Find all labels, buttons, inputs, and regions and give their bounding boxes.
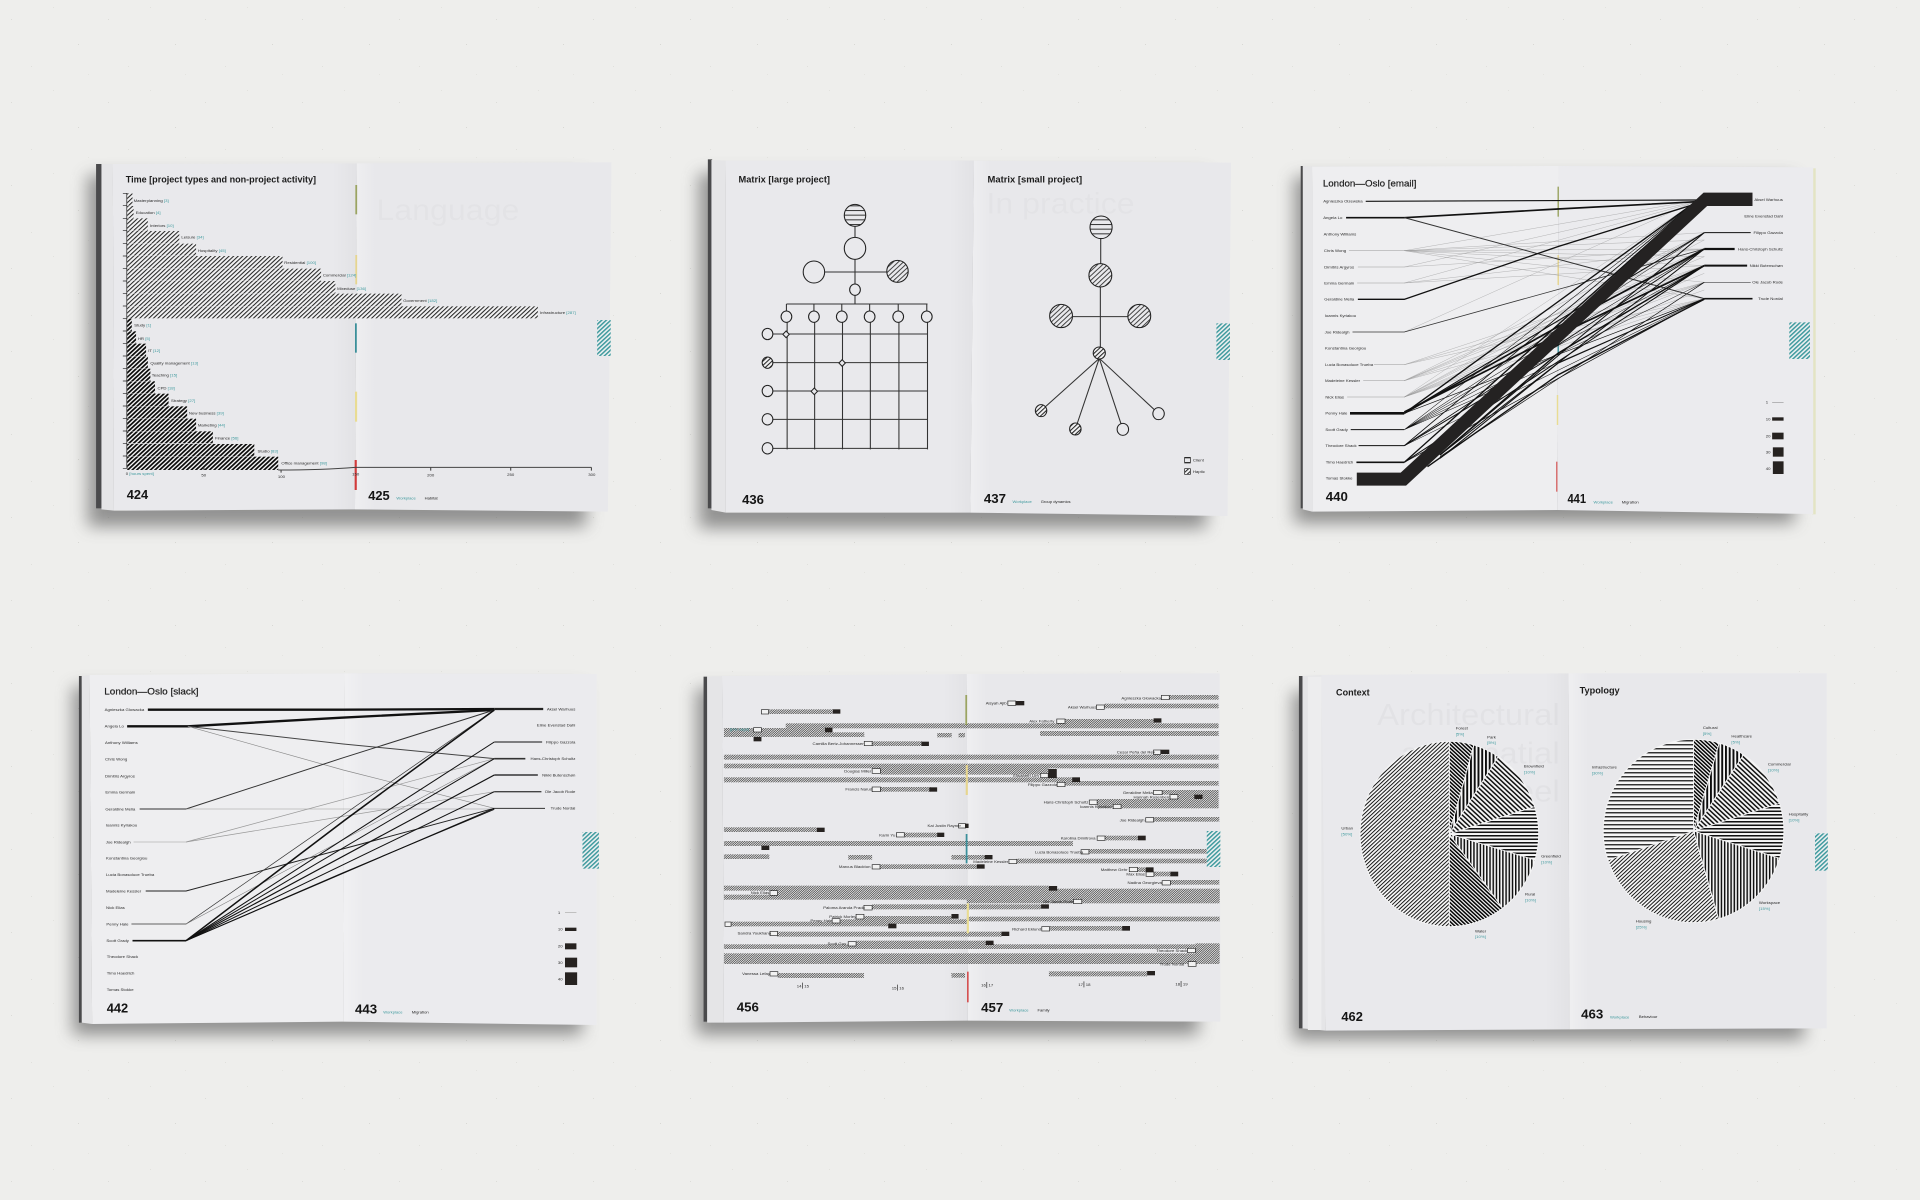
- sender names: Scott Grady: [1325, 427, 1349, 432]
- recipient names: Hans-Christoph Schultz: [531, 756, 575, 761]
- name labels: Elisabeth Lim: [1013, 773, 1039, 778]
- ghost text: [1377, 697, 1560, 808]
- bar chart: non-project activity: CPD [18]: [157, 386, 175, 391]
- title: Time [project types and non-project activity]: [126, 175, 316, 185]
- pie labels: typology: Cultural: [1703, 725, 1718, 730]
- sender names: Theodore Shack: [1325, 443, 1358, 448]
- page number 424: 424: [127, 486, 149, 502]
- sender names: Joe Ridealgh: [106, 839, 131, 844]
- pie labels: typology: [10%]: [1789, 818, 1799, 823]
- sender names: Konstantina Georgiou: [1325, 346, 1367, 351]
- name labels: Hannah Rosenberg: [1134, 794, 1171, 799]
- sender names: Tomas Stokke: [107, 987, 134, 992]
- teal tab: [597, 320, 611, 356]
- sender names: Agnieszka Glowacka: [105, 707, 145, 712]
- page number and section 457: [981, 999, 1050, 1015]
- name labels: Marcus Blackton: [839, 864, 871, 869]
- teal tab: [582, 832, 599, 869]
- page number and section 437: Workplace: [1012, 499, 1033, 504]
- page number and section 425: Habitat: [425, 496, 439, 501]
- name labels: Aksel Warhuus: [1068, 705, 1096, 710]
- legend: 40: [1766, 466, 1771, 471]
- name labels: Max Elias: [1126, 871, 1145, 876]
- page number and section 463: Behaviour: [1639, 1014, 1658, 1019]
- sender names: Angela Lo: [105, 724, 125, 729]
- recipient names: Ole Jacob Rode: [1752, 280, 1784, 285]
- ghost text: Architectural: [1377, 697, 1560, 732]
- bar chart: non-project activity: New business [39]: [189, 410, 224, 415]
- book spread: matrix diagrams: [699, 159, 1231, 528]
- title: large project: Matrix [large project]: [739, 175, 830, 185]
- sender names: Dimitris Argyros: [105, 773, 135, 778]
- recipient names: Eline Evenstad Dahl: [537, 723, 575, 728]
- title: small project: Matrix [small project]: [987, 175, 1082, 184]
- book spread: London-Oslo email: [1294, 166, 1816, 523]
- name labels: Penny Hale: [810, 918, 833, 923]
- legend: 1: [1766, 400, 1769, 405]
- page number and section 441: 441: [1567, 490, 1586, 506]
- name labels: Vanessa Lefay: [742, 971, 771, 976]
- legend: 40: [558, 977, 563, 982]
- recipient names: Aksel Warhuus: [547, 706, 575, 711]
- sender names: [105, 707, 155, 992]
- page number and section 437: [984, 490, 1071, 506]
- recipient names: Ole Jacob Rode: [545, 789, 576, 794]
- sender names: Chris Wong: [105, 757, 128, 762]
- page number and section 437: 437: [984, 490, 1006, 506]
- page number 442: 442: [107, 1000, 129, 1015]
- name labels: Theodore Shack: [1156, 948, 1188, 953]
- name labels: Aisyah Ajib: [986, 701, 1007, 706]
- sender names: Joe Ridealgh: [1325, 329, 1350, 334]
- bar chart: project types: Mixeduse [136]: [337, 286, 366, 291]
- pie chart: typology: [1603, 739, 1784, 923]
- pie labels: typology: [5%]: [1703, 731, 1711, 736]
- pie labels: context: [10%]: [1525, 898, 1536, 903]
- teal tab: [1207, 831, 1220, 867]
- end blocks: [754, 701, 1202, 975]
- pie labels: context: [10%]: [1541, 860, 1552, 865]
- sender names: Agnieszka Olzewska: [1323, 199, 1363, 204]
- name labels: [pre-sage]: [730, 727, 749, 732]
- pie labels: context: Greenfield: [1541, 854, 1561, 859]
- bar chart: non-project activity: Studio [83]: [257, 448, 278, 453]
- name labels: Agnieszka Glowacka: [1121, 695, 1162, 700]
- sender names: Angela Lo: [1323, 215, 1343, 220]
- time axis labels: 18: [1175, 982, 1181, 987]
- name labels: Ole Jacob Rode: [1043, 899, 1074, 904]
- name labels: Matthew Gehr: [1101, 867, 1128, 872]
- bar chart: non-project activity: Marketing [44]: [198, 423, 225, 428]
- recipient names: Trude Nordal: [1758, 296, 1783, 301]
- pie labels: typology: [30%]: [1592, 770, 1603, 775]
- page number and section 425: Workplace: [396, 496, 417, 501]
- page number and section 425: [368, 487, 439, 503]
- name labels: Madeleine Kessler: [973, 859, 1009, 864]
- teal tab: [1789, 322, 1810, 359]
- sender names: Emma Germain: [1324, 280, 1355, 285]
- page number and section 457: 457: [981, 999, 1004, 1015]
- bar chart: project types: Hospitality [45]: [198, 248, 226, 253]
- pie labels: typology: Commercial: [1768, 761, 1791, 766]
- ghost text: and spatial: [1401, 735, 1560, 770]
- legend: 20: [1766, 433, 1771, 438]
- page number and section 441: Workplace: [1594, 499, 1614, 504]
- bar chart: non-project activity: IT [12]: [148, 348, 160, 353]
- sender names: Geraldine Melia: [1324, 297, 1355, 302]
- time axis labels: 15: [804, 983, 810, 988]
- pie labels: context: [50%]: [1341, 831, 1352, 836]
- sender names: Madeleine Kessler: [1325, 378, 1361, 383]
- title: London—Oslo [slack]: [104, 687, 199, 697]
- legend: [1185, 457, 1205, 474]
- page number and section 463: Workplace: [1610, 1014, 1630, 1019]
- bar chart: project types: [127, 193, 576, 318]
- name labels: Patrick Morley: [829, 914, 857, 919]
- legend: [558, 910, 577, 985]
- name labels: Scott Guy: [827, 941, 847, 946]
- legend: [1766, 400, 1784, 474]
- time axis labels: 17: [1078, 982, 1084, 987]
- page number and section 443: 443: [355, 1001, 377, 1017]
- x axis: [126, 467, 596, 479]
- time axis labels: 19: [1183, 982, 1188, 987]
- legend: 30: [558, 960, 563, 965]
- sender names: Nick Elias: [1325, 394, 1344, 399]
- bar chart: project types: Infrastructure [287]: [540, 310, 576, 315]
- pie labels: typology: Housing: [1636, 919, 1652, 924]
- name labels: Paloma Aranda Prado: [823, 905, 866, 910]
- page number and section 441: Migration: [1622, 499, 1639, 504]
- time axis labels: 18: [1086, 982, 1091, 987]
- recipient names: Nikki Butenschøn: [1750, 263, 1784, 268]
- name labels: Nadina Georgieva: [1127, 880, 1163, 885]
- bar chart: project types: Education [4]: [136, 210, 161, 215]
- sender names: Emma Germain: [105, 790, 136, 795]
- name labels: Nick Elias: [751, 890, 769, 895]
- title: typology: Typology: [1580, 686, 1620, 695]
- page number 456: 456: [737, 999, 759, 1014]
- name labels: Karolina Dimitrova: [1061, 836, 1096, 841]
- book spread: London-Oslo slack: [73, 673, 599, 1035]
- page number and section 437: Group dynamics: [1041, 499, 1071, 504]
- time axis labels: 14: [797, 983, 802, 988]
- sender names: Ioannis Kyriakou: [106, 823, 138, 828]
- y axis: [123, 193, 127, 468]
- sender names: Anthony Williams: [105, 740, 138, 745]
- recipient names: [1738, 197, 1784, 301]
- book spread: time bar chart: [88, 162, 611, 527]
- legend: 1: [558, 910, 561, 915]
- page number 436: 436: [742, 491, 764, 507]
- name labels: Geraldine Melia: [1123, 790, 1153, 795]
- bar chart: non-project activity: Strategy [27]: [171, 398, 195, 403]
- pie labels: context: [10%]: [1524, 769, 1535, 774]
- page number and section 463: [1581, 1006, 1658, 1022]
- sender names: Chris Wong: [1324, 248, 1347, 253]
- sender names: Tomas Stokke: [1326, 476, 1353, 481]
- sender names: Dimitris Argyros: [1324, 264, 1354, 269]
- name labels: Francis Narud: [845, 787, 873, 792]
- sender names: Lucia Bonasoluce Trueba: [106, 872, 155, 877]
- sender names: Nick Elias: [106, 905, 125, 910]
- pie labels: typology: Workspace: [1759, 900, 1781, 905]
- spine colour marks: [965, 695, 969, 1002]
- book spread: family timeline: [696, 673, 1220, 1035]
- bar chart: non-project activity: Office management [98]: [281, 461, 327, 466]
- recipient names: Filippo Gazzola: [546, 739, 576, 744]
- time axis labels: 16: [981, 983, 987, 988]
- sender names: Lucia Bonasoluce Trueba: [1325, 362, 1374, 367]
- bar chart: non-project activity: [127, 319, 327, 470]
- name labels: Hans-Christoph Schultz: [1044, 800, 1088, 805]
- sender names: Theodore Shack: [107, 954, 139, 959]
- page number and section 463: 463: [1581, 1006, 1604, 1022]
- ghost text: feel: [1507, 774, 1560, 808]
- sender names: Timo Haedrich: [107, 971, 135, 976]
- sender names: [1323, 199, 1374, 481]
- x axis: 100: [278, 474, 286, 479]
- matrix diagram: small project: [1035, 216, 1164, 435]
- name labels: Douglas Miller: [844, 768, 872, 773]
- page number and section 441: [1567, 490, 1639, 506]
- sender names: Scott Grady: [106, 938, 130, 943]
- bar chart: project types: Interiors [10]: [150, 223, 174, 228]
- bar chart: non-project activity: Quality management [13]: [150, 360, 198, 365]
- name labels: Kai Justin Rayner: [927, 823, 962, 828]
- sankey lines: slack: [127, 709, 545, 941]
- name labels: Camilla Bertz-Johannessen: [812, 741, 865, 746]
- name labels: Cesar Peña del Rey: [1117, 750, 1156, 755]
- pie labels: typology: [25%]: [1636, 924, 1647, 929]
- page number 440: 440: [1326, 488, 1348, 504]
- sankey lines: email: [1346, 200, 1752, 467]
- page number and section 457: Family: [1037, 1007, 1050, 1012]
- recipient names: Aksel Warhuus: [1754, 197, 1783, 202]
- pie labels: typology: Infrastructure: [1592, 764, 1618, 769]
- sender names: Ioannis Kyriakou: [1325, 313, 1357, 318]
- pie labels: context: Park: [1487, 734, 1497, 739]
- pie labels: context: Urban: [1341, 826, 1354, 831]
- bar chart: project types: Leisure [34]: [181, 234, 204, 239]
- page number and section 443: Migration: [412, 1010, 429, 1015]
- name labels: Joe Ridealgh: [1120, 817, 1145, 822]
- legend: 30: [1766, 450, 1771, 455]
- name labels: Lucia Bonasoluce Trueba: [1035, 849, 1084, 854]
- pie labels: context: Forest: [1456, 725, 1469, 730]
- name labels: [730, 695, 1188, 976]
- pie labels: typology: Hospitality: [1789, 812, 1809, 817]
- bar chart: non-project activity: Finance [56]: [215, 436, 238, 441]
- page number and section 443: [355, 1001, 429, 1017]
- name labels: Trude Nordal: [1160, 961, 1184, 966]
- time axis labels: 17: [989, 983, 994, 988]
- sender names: Penny Hale: [106, 921, 129, 926]
- title: London—Oslo [email]: [1323, 179, 1416, 188]
- x axis: 150: [352, 472, 360, 477]
- thick sankey band: Tomas Stokke to Aksel Warhuus: [1357, 193, 1752, 486]
- bar chart: project types: Government [182]: [403, 298, 437, 303]
- pie labels: context: [1341, 725, 1561, 939]
- recipient names: Nikki Butenschøn: [542, 772, 576, 777]
- name labels: Alex Fatherty: [1029, 719, 1055, 724]
- recipient names: [531, 706, 576, 811]
- sender names: Madeleine Kessler: [106, 888, 142, 893]
- bar chart: non-project activity: HR [5]: [138, 336, 150, 341]
- title: context: Context: [1336, 688, 1370, 697]
- pie chart: context: [1360, 741, 1539, 927]
- legend: Haptic: [1193, 469, 1205, 474]
- teal tab: [1216, 323, 1230, 360]
- sender names: Geraldine Melia: [105, 806, 136, 811]
- pie labels: context: Brownfield: [1524, 763, 1545, 768]
- x axis: 300: [588, 472, 596, 477]
- bar chart: project types: Commercial [124]: [323, 273, 356, 278]
- pie labels: typology: Healthcare: [1731, 734, 1753, 739]
- recipient names: Hans-Christoph Schultz: [1738, 246, 1783, 251]
- x axis: 200: [427, 473, 435, 478]
- page number 462: 462: [1341, 1008, 1363, 1024]
- x axis: 250: [507, 472, 515, 477]
- x axis: 50: [201, 473, 207, 478]
- pie labels: context: [10%]: [1475, 934, 1486, 939]
- name labels: Ioannis Kyriakou: [1080, 804, 1112, 809]
- time axis labels: 16: [899, 985, 905, 990]
- name labels: Filippo Gazzola: [1028, 782, 1058, 787]
- page number and section 443: Workplace: [383, 1010, 403, 1015]
- bar chart: non-project activity: Teaching [15]: [152, 372, 177, 377]
- teal tab: [1815, 833, 1828, 871]
- pie labels: typology: [15%]: [1759, 906, 1770, 911]
- name labels: Sandra Youkhana: [737, 931, 772, 936]
- bar chart: project types: Residential [100]: [284, 260, 316, 265]
- name labels: Richard Eklund: [1012, 926, 1042, 931]
- pie labels: context: [5%]: [1456, 731, 1464, 736]
- start boxes: [725, 695, 1196, 976]
- time axis labels: 15: [892, 985, 897, 990]
- bar chart: non-project activity: Study [1]: [134, 322, 151, 327]
- pie labels: typology: [1592, 725, 1809, 929]
- sender names: Penny Hale: [1325, 411, 1348, 416]
- page number and section 457: Workplace: [1009, 1007, 1029, 1012]
- legend: 10: [1766, 416, 1771, 421]
- recipient names: Eline Evenstad Dahl: [1744, 213, 1783, 218]
- legend: 10: [558, 927, 563, 932]
- sender names: Konstantina Georgiou: [106, 856, 148, 861]
- x axis: 0 [hours spent]: [126, 471, 154, 476]
- page number and section 425: 425: [368, 487, 390, 503]
- name labels: Karin Yu: [879, 832, 896, 837]
- bar chart: project types: Masterplanning [3]: [134, 198, 169, 203]
- pie labels: context: Rural: [1525, 892, 1535, 897]
- sender names: Timo Haedrich: [1326, 460, 1354, 465]
- recipient names: Filippo Gazzola: [1753, 230, 1784, 235]
- legend: 20: [558, 943, 563, 948]
- matrix diagram: large project: [762, 204, 932, 454]
- pie labels: typology: [10%]: [1768, 767, 1779, 772]
- pie labels: typology: [5%]: [1731, 739, 1740, 744]
- pie labels: context: Water: [1475, 928, 1487, 933]
- book spread: context and typology pies: [1293, 673, 1828, 1040]
- sender names: Anthony Williams: [1324, 232, 1356, 237]
- legend: Client: [1193, 458, 1205, 463]
- timeline hatch bars: [724, 695, 1220, 978]
- recipient names: Trude Nordal: [551, 806, 575, 811]
- time axis labels: [797, 981, 1188, 991]
- pie labels: context: [5%]: [1487, 740, 1496, 745]
